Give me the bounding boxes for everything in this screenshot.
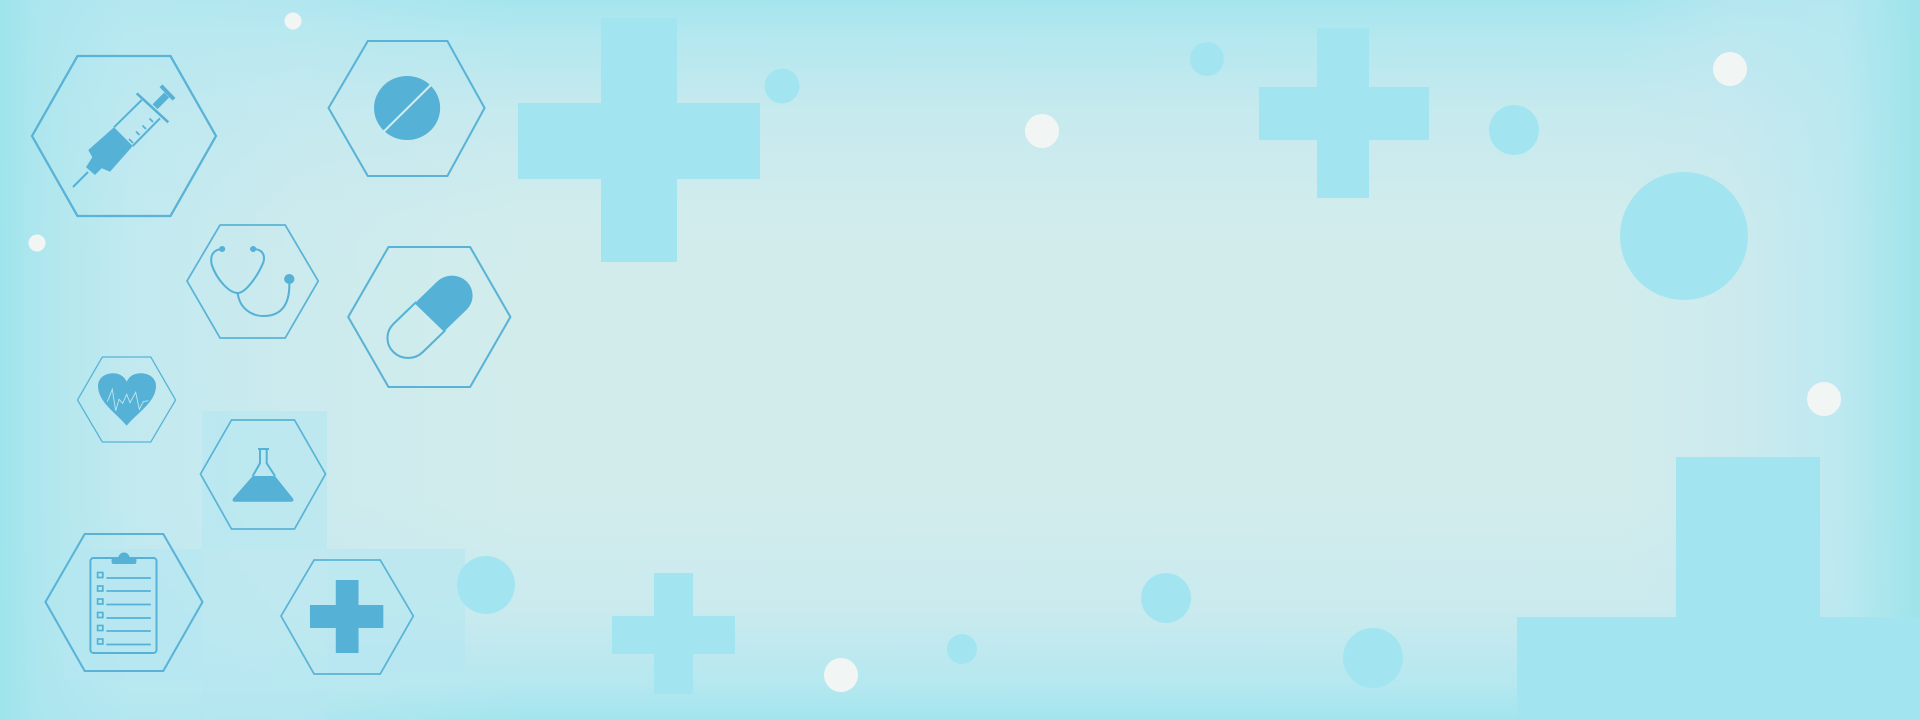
icon: heart in hexagon — [78, 357, 176, 442]
stepped block bottom right — [1517, 457, 1920, 720]
icon: syringe in hexagon — [32, 56, 216, 216]
icon: medical cross in hexagon — [281, 560, 413, 674]
icon: clipboard in hexagon — [45, 534, 203, 671]
icon: tablet in hexagon — [329, 41, 485, 176]
large plus top centre — [518, 18, 760, 262]
blue circles — [457, 42, 1748, 688]
soft panels behind lower hexagons — [64, 411, 465, 720]
plus top right — [1259, 28, 1429, 198]
icon: stethoscope in hexagon — [187, 225, 318, 338]
icon: capsule in hexagon — [348, 247, 510, 387]
plus bottom centre — [612, 573, 735, 694]
icon: flask in hexagon — [200, 420, 326, 529]
